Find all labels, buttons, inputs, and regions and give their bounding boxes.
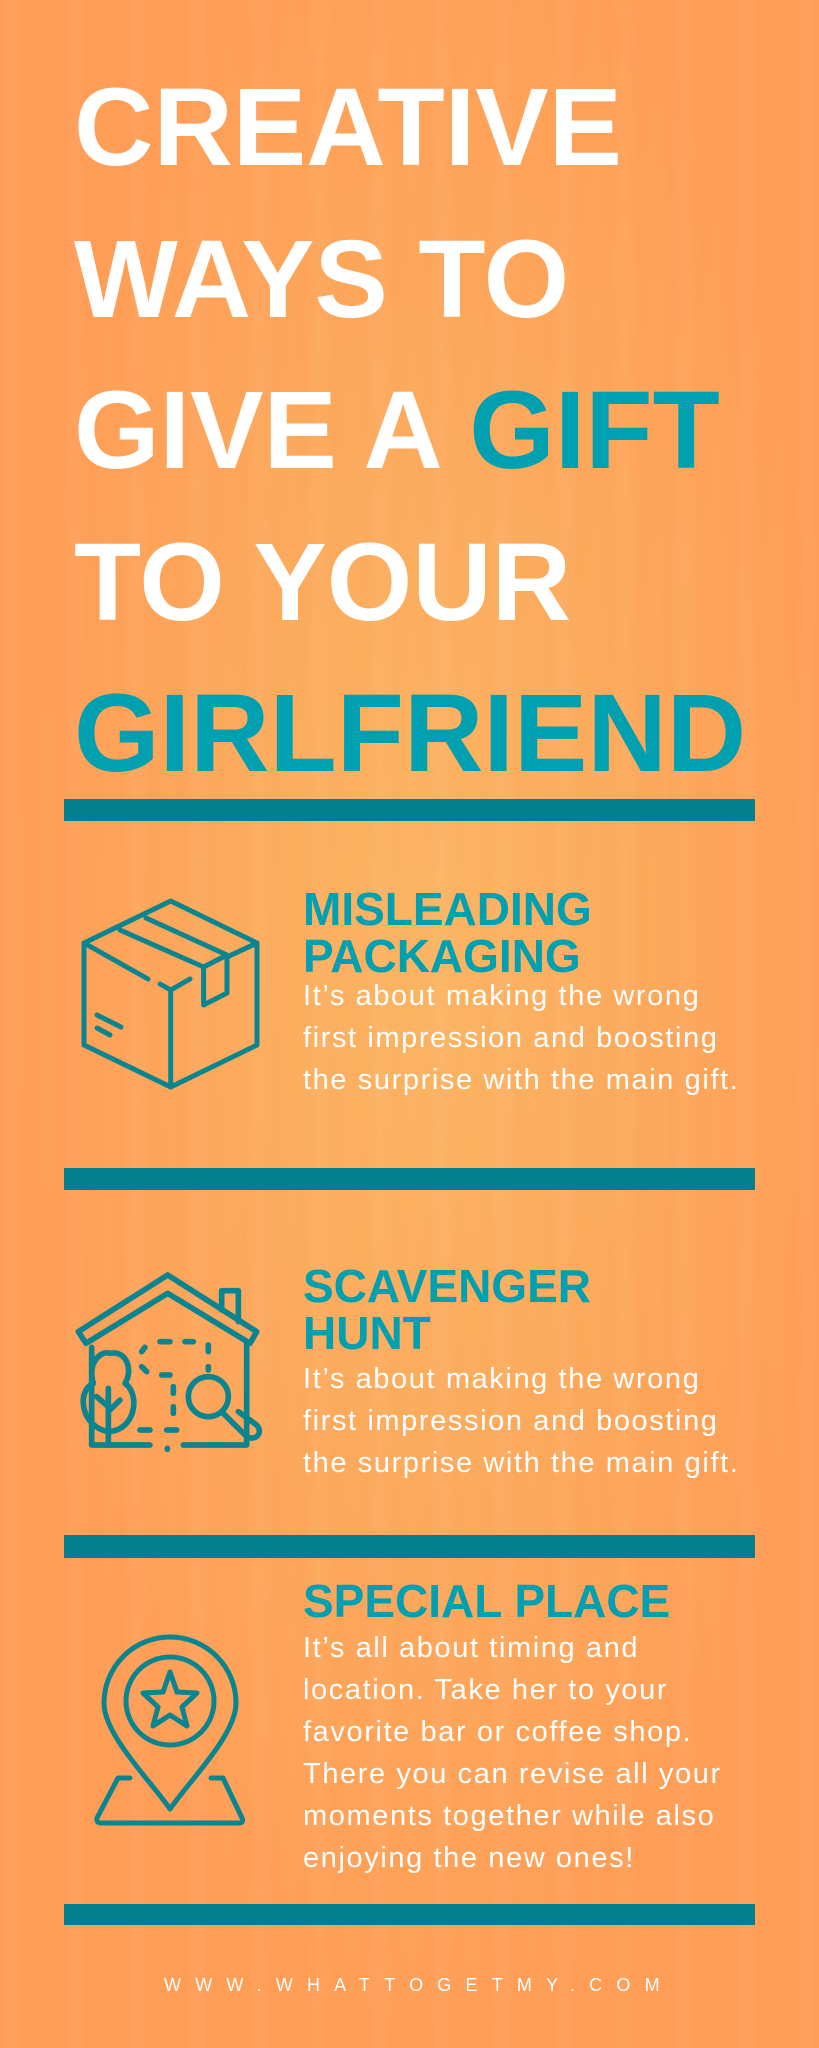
title: CREATIVE — [74, 66, 622, 189]
heading: misleading packaging: PACKAGING — [303, 930, 581, 982]
text: misleading packaging: the surprise with the main gift. — [303, 1064, 739, 1096]
title: TO YOUR — [74, 520, 571, 644]
text: misleading packaging — [303, 980, 739, 1096]
text: scavenger hunt — [303, 1363, 739, 1479]
heading: misleading packaging — [303, 883, 592, 982]
heading: misleading packaging: MISLEADING — [303, 883, 592, 935]
text: special place: moments together while also — [303, 1800, 715, 1832]
text: special place: There you can revise all your — [303, 1758, 722, 1790]
title: WAYS TO — [74, 218, 569, 340]
text: misleading packaging: It’s about making the wrong — [303, 980, 700, 1012]
heading: scavenger hunt: SCAVENGER — [303, 1260, 591, 1312]
text: special place — [303, 1632, 722, 1874]
text: misleading packaging: first impression and boosting — [303, 1022, 719, 1054]
heading: scavenger hunt — [303, 1260, 591, 1359]
title: GIRLFRIEND — [74, 672, 746, 795]
divider bar 1 — [64, 799, 755, 821]
icon: house scavenger hunt — [76, 1272, 262, 1452]
text: scavenger hunt: the surprise with the main gift. — [303, 1447, 739, 1479]
text: special place: enjoying the new ones! — [303, 1842, 635, 1874]
title — [74, 66, 746, 795]
text: special place: favorite bar or coffee shop. — [303, 1716, 692, 1748]
heading: special place: SPECIAL PLACE — [303, 1575, 670, 1627]
divider bar 2 — [64, 1168, 755, 1190]
title: GIVE A GIFT — [74, 369, 720, 492]
divider bar 4 — [64, 1904, 755, 1925]
heading: scavenger hunt: HUNT — [303, 1307, 431, 1359]
text: special place: location. Take her to your — [303, 1674, 668, 1706]
divider bar 3 — [64, 1535, 755, 1558]
text: special place: It’s all about timing and — [303, 1632, 639, 1664]
footer url: WWW.WHATTOGETMY.COM — [164, 1975, 674, 1995]
text: scavenger hunt: It’s about making the wrong — [303, 1363, 700, 1395]
text: scavenger hunt: first impression and boosting — [303, 1405, 719, 1437]
